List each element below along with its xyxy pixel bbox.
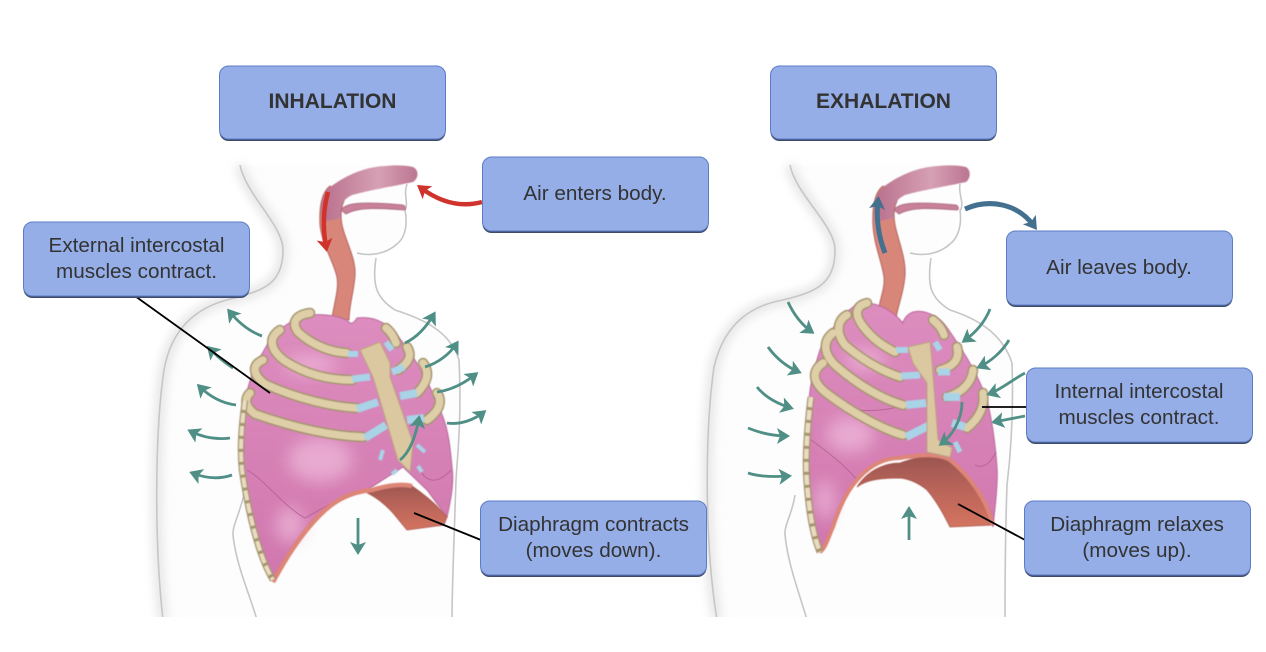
label: air leaves body <box>1006 231 1232 307</box>
costal margin edge <box>241 400 273 580</box>
heading: exhalation: EXHALATION <box>816 90 951 113</box>
label: diaphragm contracts: Diaphragm contracts <box>498 513 689 536</box>
teal expansion arrows, ribs move outward <box>190 311 484 552</box>
leader line: internal intercostal muscles <box>982 406 1027 408</box>
teal compression arrows, ribs move inward <box>748 302 1025 540</box>
exhalation anatomy illustration <box>707 165 1034 620</box>
heading: inhalation <box>220 66 446 141</box>
airway: nasal cavity and trachea <box>320 165 418 320</box>
diaphragm <box>820 455 993 552</box>
label: diaphragm relaxes: (moves up). <box>1082 539 1192 562</box>
label: diaphragm contracts <box>480 501 706 577</box>
costal cartilage <box>896 342 965 452</box>
label: external intercostal muscles contract: muscles contract. <box>56 260 217 283</box>
leader line: diaphragm contracts <box>414 513 481 540</box>
heading: inhalation: INHALATION <box>269 90 396 113</box>
ribs <box>815 303 983 435</box>
costal margin edge <box>806 397 820 552</box>
label: diaphragm contracts: (moves down). <box>526 539 661 562</box>
red air arrows <box>324 188 482 247</box>
label: external intercostal muscles contract: External intercostal <box>49 234 224 257</box>
inhalation anatomy illustration <box>157 165 484 620</box>
label: air enters body: Air enters body. <box>523 182 667 205</box>
label: internal intercostal muscles contract <box>1026 368 1252 444</box>
lung lobe shading <box>807 405 996 480</box>
leader line: diaphragm relaxes <box>958 504 1025 540</box>
costal cartilage <box>348 342 425 474</box>
lungs <box>806 303 997 552</box>
label: diaphragm relaxes <box>1024 501 1250 577</box>
label: external intercostal muscles contract <box>24 222 250 298</box>
label: air leaves body: Air leaves body. <box>1046 256 1192 279</box>
blue air arrows <box>877 201 1034 253</box>
sternum <box>360 342 413 472</box>
airway: nasal cavity and trachea <box>873 165 970 318</box>
body silhouette <box>707 165 1013 620</box>
heading: exhalation <box>770 66 996 141</box>
lung highlights <box>815 350 885 520</box>
rib cage <box>241 313 440 580</box>
label: diaphragm relaxes: Diaphragm relaxes <box>1050 513 1224 536</box>
sternum <box>908 342 952 457</box>
lungs <box>241 315 453 580</box>
leader line: external intercostal muscles <box>135 296 270 393</box>
diaphragm <box>273 484 447 582</box>
lung highlights <box>276 355 352 543</box>
ribs <box>246 313 440 437</box>
lung lobe shading <box>247 470 451 518</box>
label: internal intercostal muscles contract: muscles contract. <box>1059 406 1219 429</box>
rib cage <box>806 303 983 552</box>
label: air enters body <box>482 157 708 233</box>
label: internal intercostal muscles contract: Internal intercostal <box>1054 380 1224 403</box>
body silhouette <box>157 165 460 620</box>
